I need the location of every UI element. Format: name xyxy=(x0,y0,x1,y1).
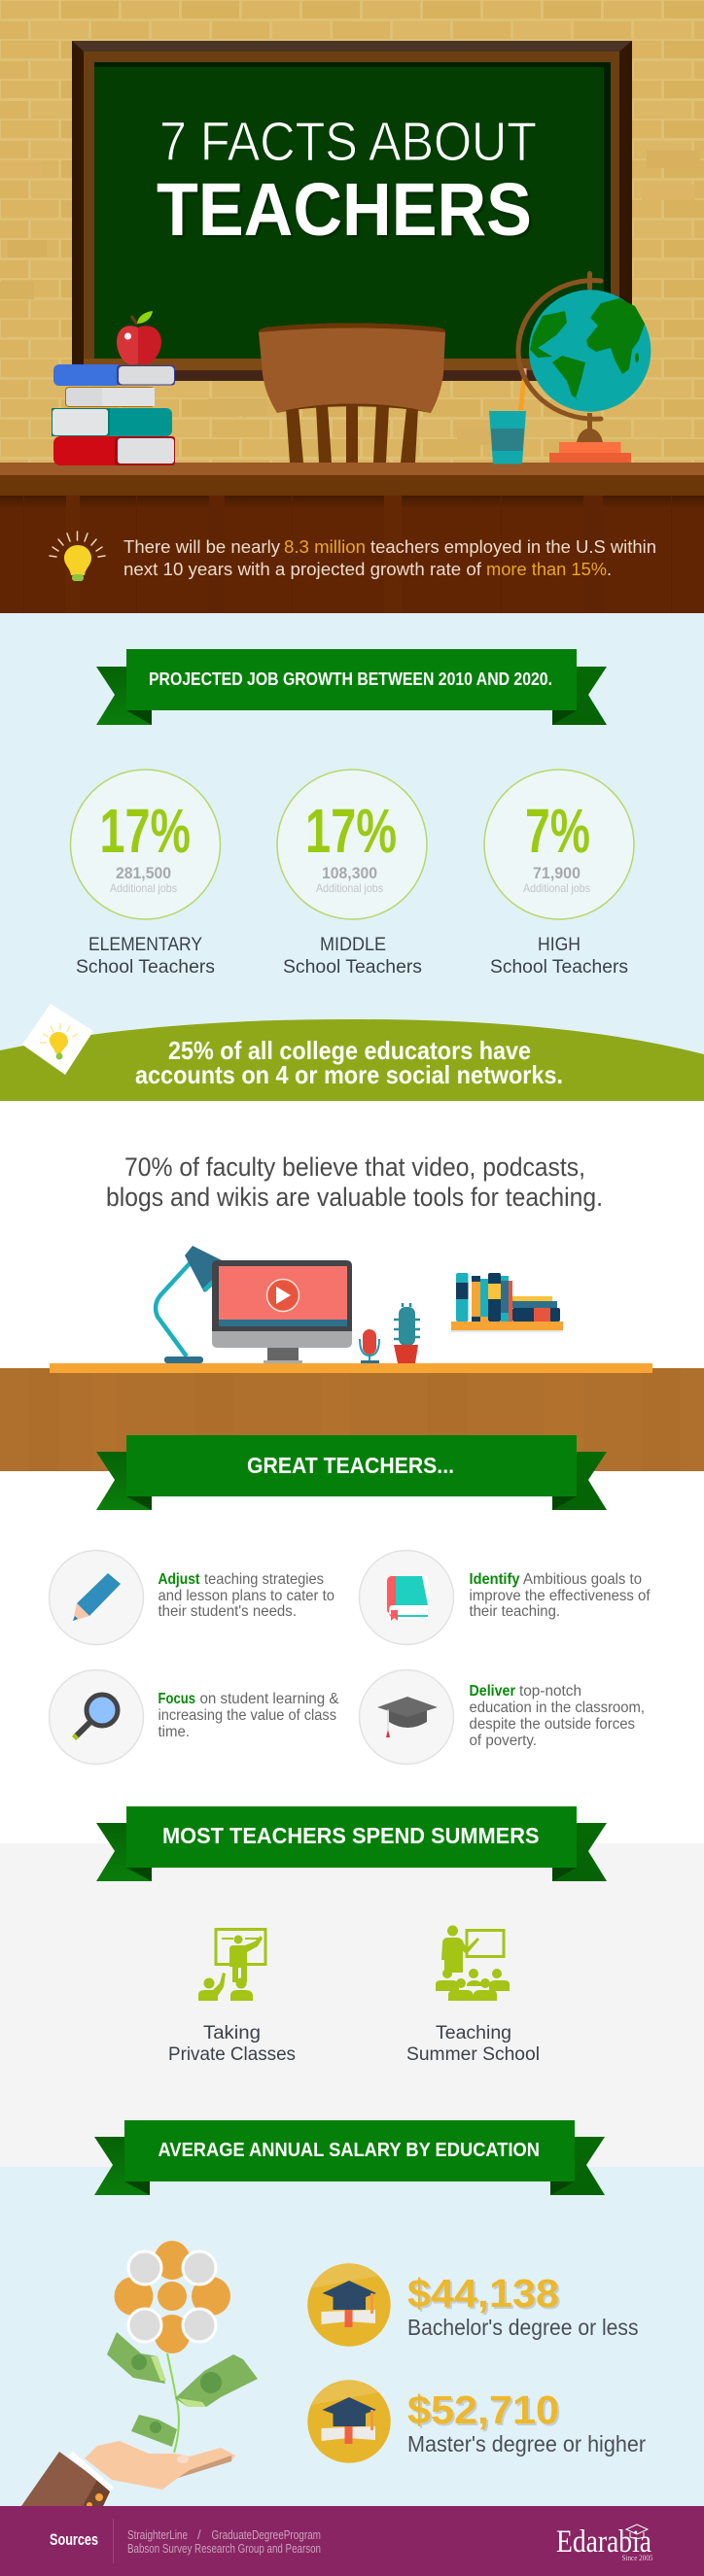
pencil cup xyxy=(489,368,527,464)
illustration: money plant in hand xyxy=(21,2241,258,2508)
stat: elementary: 17% xyxy=(99,796,191,866)
item: deliver: despite the outside forces xyxy=(469,1716,635,1733)
title xyxy=(157,111,537,252)
chair xyxy=(259,323,445,463)
icon: graduation cap xyxy=(377,1697,438,1737)
salary: master's: Master's degree or higher xyxy=(407,2431,646,2456)
sources: / xyxy=(197,2527,201,2542)
item: adjust: teaching strategies xyxy=(204,1571,324,1588)
salary: bachelor's: Bachelor's degree or less xyxy=(407,2315,638,2340)
stat: elementary: ELEMENTARY xyxy=(88,935,202,955)
background: page sections xyxy=(0,613,704,2506)
intro text: 8.3 million xyxy=(284,537,366,557)
panel: college educators band xyxy=(0,1004,704,1101)
ribbon heading: summers: MOST TEACHERS SPEND SUMMERS xyxy=(162,1823,539,1848)
salary: bachelor's xyxy=(307,2263,638,2347)
intro text: more than 15% xyxy=(486,560,607,579)
item: teaching summer school: Teaching xyxy=(436,2023,511,2044)
icon: light bulb xyxy=(50,532,105,581)
panel: college educators band: 25% of all college educators have xyxy=(168,1036,531,1065)
icon: monitor with video xyxy=(212,1260,352,1363)
money leaves xyxy=(107,2332,258,2447)
ribbon heading: great teachers xyxy=(96,1435,607,1510)
hand and sleeve xyxy=(21,2441,235,2508)
icon: medallion with cap and diploma xyxy=(307,2263,391,2347)
footer xyxy=(0,2506,704,2576)
panel: college educators band: accounts on 4 or more social networks. xyxy=(135,1060,563,1089)
item: adjust: Adjust xyxy=(158,1571,200,1588)
ribbon heading: projected job growth xyxy=(96,649,607,725)
sources: Sources xyxy=(50,2530,98,2549)
text block: 70% of faculty: 70% of faculty believe that video, podcasts, xyxy=(124,1152,585,1182)
item: focus: on student learning & xyxy=(200,1691,339,1707)
item: focus xyxy=(49,1669,339,1765)
wood desk xyxy=(0,1363,704,1471)
item: identify: improve the effectiveness of xyxy=(469,1588,651,1604)
stat: elementary xyxy=(70,770,220,978)
icon: desk lamp xyxy=(156,1246,231,1363)
item: teaching summer school xyxy=(406,1926,540,2065)
icon: microphone xyxy=(360,1329,379,1363)
sources: Babson Survey Research Group and Pearson xyxy=(127,2541,321,2556)
item: adjust xyxy=(49,1551,334,1644)
item: deliver: education in the classroom, xyxy=(469,1700,645,1716)
item: deliver xyxy=(360,1669,645,1765)
item: identify xyxy=(360,1551,651,1644)
intro text: teachers employed in the U.S within xyxy=(370,537,656,557)
icon: book xyxy=(387,1576,428,1621)
item: taking private classes xyxy=(168,1930,296,2065)
stat: middle: MIDDLE xyxy=(320,935,386,955)
sources: GraduateDegreeProgram xyxy=(212,2527,321,2542)
logo: Edarabia: Edarabia xyxy=(556,2524,651,2559)
stat: middle: 108,300 xyxy=(322,864,377,882)
stat: high: Additional jobs xyxy=(523,881,590,895)
item: identify: Identify xyxy=(469,1571,520,1588)
icon: magnifier xyxy=(74,1695,118,1738)
item: adjust: and lesson plans to cater to xyxy=(158,1588,334,1604)
item: focus: increasing the value of class xyxy=(158,1707,336,1724)
stat: middle xyxy=(277,770,427,978)
item: deliver: Deliver xyxy=(469,1683,515,1700)
stat: high: 7% xyxy=(525,796,590,866)
text block: 70% of faculty xyxy=(106,1152,603,1212)
intro text: There will be nearly xyxy=(123,537,280,557)
brick wall xyxy=(0,0,704,466)
icon: teacher at board with students xyxy=(198,1930,265,2001)
icon: medallion with cap and diploma xyxy=(307,2380,391,2463)
item: identify: their teaching. xyxy=(469,1603,560,1620)
salary: master's xyxy=(307,2380,646,2463)
chalkboard xyxy=(72,41,632,381)
ribbon heading: projected job growth: PROJECTED JOB GROWTH BETWEEN 2010 AND 2020. xyxy=(149,670,552,689)
title: TEACHERS xyxy=(157,168,532,252)
stat: middle: 17% xyxy=(305,796,397,866)
stat: middle: School Teachers xyxy=(283,957,422,978)
icon: tilted note with bulb xyxy=(22,1004,93,1075)
item: taking private classes: Taking xyxy=(203,2023,261,2044)
stat: high xyxy=(484,770,634,978)
title: 7 FACTS ABOUT xyxy=(159,111,537,173)
apple xyxy=(117,311,161,364)
stat: high: HIGH xyxy=(538,935,581,955)
logo: Edarabia: Since 2005 xyxy=(622,2554,653,2562)
ribbon heading: salary xyxy=(94,2120,605,2195)
ribbon heading: salary: AVERAGE ANNUAL SALARY BY EDUCATION xyxy=(158,2140,540,2161)
item: adjust: their student's needs. xyxy=(158,1603,297,1620)
item: identify: Ambitious goals to xyxy=(523,1571,642,1588)
stack of books xyxy=(52,364,175,465)
icon: pencil xyxy=(73,1573,121,1621)
intro text xyxy=(123,537,656,579)
sources xyxy=(50,2519,321,2563)
ribbon heading: summers xyxy=(96,1806,607,1881)
stem xyxy=(167,2353,179,2453)
icon: book shelf xyxy=(451,1273,563,1332)
stat: elementary: Additional jobs xyxy=(110,881,177,895)
stat: elementary: 281,500 xyxy=(116,864,171,882)
sources: StraighterLine xyxy=(127,2527,188,2542)
item: focus: time. xyxy=(158,1724,190,1740)
ribbon heading: great teachers: GREAT TEACHERS... xyxy=(247,1453,454,1478)
item: teaching summer school: Summer School xyxy=(406,2044,540,2065)
text block: 70% of faculty: blogs and wikis are valuable tools for teaching. xyxy=(106,1183,603,1212)
stat: high: School Teachers xyxy=(490,957,628,978)
stat: elementary: School Teachers xyxy=(76,957,215,978)
item: deliver: top-notch xyxy=(519,1683,581,1700)
globe xyxy=(518,271,651,463)
intro text: . xyxy=(607,560,612,579)
icon: teacher with class xyxy=(436,1926,510,2001)
intro text: next 10 years with a projected growth rate of xyxy=(123,560,482,579)
stat: middle: Additional jobs xyxy=(316,881,383,895)
icon: potted cactus xyxy=(394,1303,420,1363)
salary: bachelor's: $44,138 xyxy=(407,2271,559,2316)
flower of coins xyxy=(115,2241,230,2353)
item: taking private classes: Private Classes xyxy=(168,2044,296,2065)
item: deliver: of poverty. xyxy=(469,1733,537,1749)
fact: 8.3 million teachers xyxy=(50,532,656,581)
table top xyxy=(0,463,704,613)
stat: high: 71,900 xyxy=(533,864,581,882)
salary: master's: $52,710 xyxy=(407,2387,559,2432)
item: focus: Focus xyxy=(158,1691,195,1707)
